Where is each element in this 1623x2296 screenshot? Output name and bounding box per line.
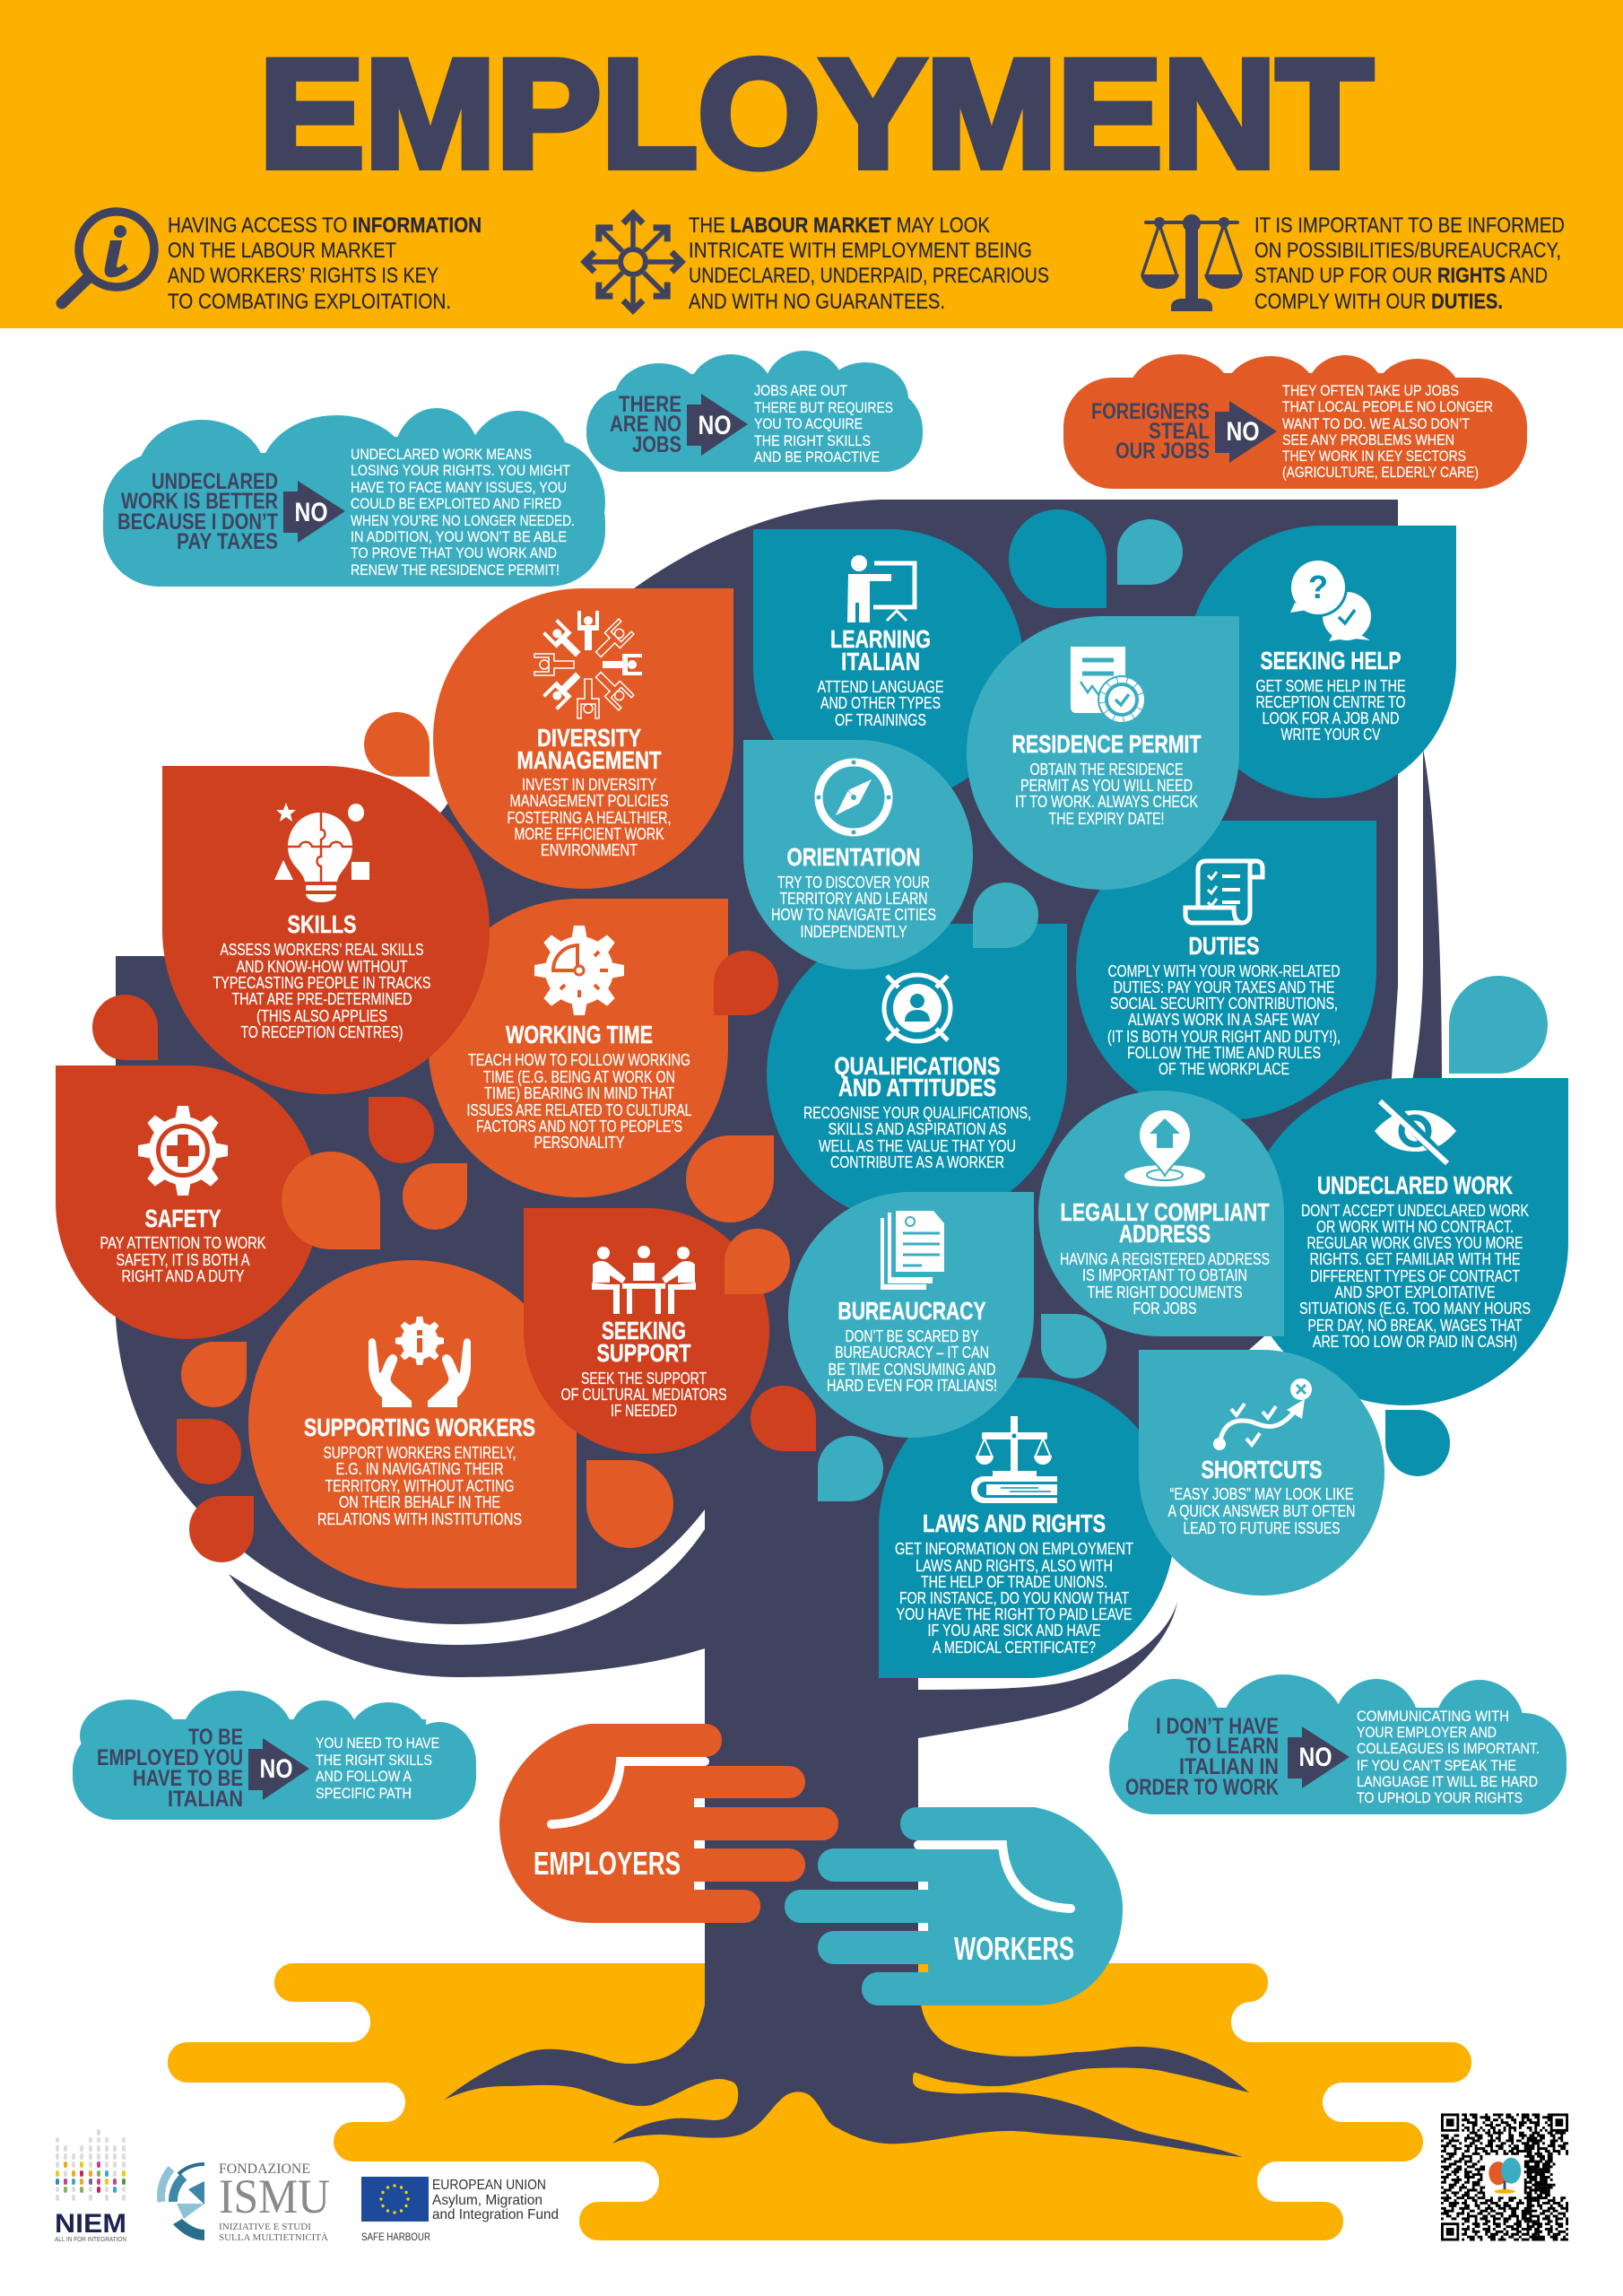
body text xyxy=(213,941,430,1041)
body text: LEAD TO FUTURE ISSUES xyxy=(1184,1519,1340,1537)
answer: COULD BE EXPLOITED AND FIRED xyxy=(351,495,561,512)
icon: scales on book xyxy=(971,1416,1057,1503)
cloud: to be employed myth xyxy=(73,1691,476,1820)
icon: speech bubbles: ? xyxy=(1308,569,1328,605)
answer: YOU NEED TO HAVE xyxy=(316,1735,439,1752)
body text xyxy=(771,874,936,941)
panel: diversity management xyxy=(433,588,733,889)
body text xyxy=(100,1234,265,1285)
body text: ON THEIR BEHALF IN THE xyxy=(339,1493,500,1511)
body text: SAFETY, IT IS BOTH A xyxy=(117,1251,249,1269)
body text: OF CULTURAL MEDIATORS xyxy=(561,1386,726,1404)
body text: FOLLOW THE TIME AND RULES xyxy=(1127,1044,1321,1062)
body text: TYPECASTING PEOPLE IN TRACKS xyxy=(213,974,430,992)
small leaves xyxy=(92,509,1548,1562)
heading: LEGALLY COMPLIANT xyxy=(1060,1198,1270,1226)
myth statement: PAY TAXES xyxy=(177,529,278,554)
body text xyxy=(1299,1202,1531,1351)
body text xyxy=(1060,1250,1270,1318)
panel: legally compliant address xyxy=(1038,1091,1284,1336)
heading: LAWS AND RIGHTS xyxy=(923,1509,1106,1537)
body text xyxy=(818,678,943,729)
arrow: no xyxy=(248,1738,309,1800)
arrow: no xyxy=(1215,401,1277,463)
logo: Fondazione ISMU xyxy=(161,2161,330,2243)
logo: European Union fund: SAFE HARBOUR xyxy=(361,2231,430,2243)
answer: YOU TO ACQUIRE xyxy=(754,415,863,432)
body text: E.G. IN NAVIGATING THEIR xyxy=(335,1460,504,1478)
body text: PAY ATTENTION TO WORK xyxy=(100,1234,265,1252)
cloud: there are no jobs myth xyxy=(586,351,923,472)
body text: SEEK THE SUPPORT xyxy=(581,1370,707,1387)
logo: Fondazione ISMU: FONDAZIONE xyxy=(219,2161,310,2177)
heading: LEARNING xyxy=(830,625,931,653)
myth statement: ITALIAN IN xyxy=(1179,1754,1279,1779)
body text: BE TIME CONSUMING AND xyxy=(829,1361,995,1378)
panel: safety xyxy=(56,1065,319,1339)
icon: three people at table xyxy=(592,1246,696,1314)
icon: puzzle light bulb xyxy=(274,803,369,902)
label: workers: WORKERS xyxy=(954,1930,1074,1967)
text: rights and duties: ON POSSIBILITIES/BUREAUCRACY, xyxy=(1254,239,1561,263)
body text: (THIS ALSO APPLIES xyxy=(256,1007,387,1025)
body text: WELL AS THE VALUE THAT YOU xyxy=(819,1137,1016,1155)
myth statement xyxy=(117,469,278,554)
answer: WANT TO DO. WE ALSO DON’T xyxy=(1282,415,1470,432)
heading: SEEKING HELP xyxy=(1261,647,1401,674)
body text: FOR INSTANCE, DO YOU KNOW THAT xyxy=(899,1589,1129,1607)
heading: DUTIES xyxy=(1189,932,1259,960)
myth statement xyxy=(1125,1714,1279,1800)
body text: IS IMPORTANT TO OBTAIN xyxy=(1082,1266,1247,1284)
panel: supporting workers xyxy=(248,1260,577,1588)
body text: WRITE YOUR CV xyxy=(1280,726,1381,744)
body text: TRY TO DISCOVER YOUR xyxy=(777,874,930,891)
body text: DON’T BE SCARED BY xyxy=(845,1327,979,1345)
body text: A QUICK ANSWER BUT OFTEN xyxy=(1167,1502,1356,1520)
text: rights and duties: IT IS IMPORTANT TO BE INFORMED xyxy=(1254,213,1565,238)
body text: ASSESS WORKERS’ REAL SKILLS xyxy=(221,941,423,959)
body text: PERSONALITY xyxy=(534,1134,624,1152)
NIEM tagline: ALL IN FOR INTEGRATION xyxy=(55,2237,126,2243)
body text: PERMIT AS YOU WILL NEED xyxy=(1020,777,1193,795)
logo: Fondazione ISMU: ISMU xyxy=(219,2170,330,2223)
body text: TEACH HOW TO FOLLOW WORKING xyxy=(468,1051,690,1069)
myth statement: JOBS xyxy=(632,432,681,457)
icon: crossed-out eye xyxy=(1375,1100,1456,1164)
answer: UNDECLARED WORK MEANS xyxy=(351,446,532,463)
heading: QUALIFICATIONS xyxy=(834,1052,1001,1080)
answer: HAVE TO FACE MANY ISSUES, YOU xyxy=(351,479,567,496)
answer: TO UPHOLD YOUR RIGHTS xyxy=(1357,1789,1523,1806)
body text xyxy=(508,776,671,859)
myth statement: TO LEARN xyxy=(1186,1734,1279,1759)
hand: employers xyxy=(499,1724,838,1923)
logo: NIEM xyxy=(55,2129,126,2243)
body text: IF NEEDED xyxy=(611,1402,677,1420)
panel: undeclared work xyxy=(1241,1078,1568,1405)
answer: (AGRICULTURE, ELDERLY CARE) xyxy=(1282,464,1479,481)
heading: ITALIAN xyxy=(841,648,920,675)
body text: THE RIGHT DOCUMENTS xyxy=(1087,1283,1243,1301)
icon: checklist scroll xyxy=(1185,861,1263,923)
text: rights and duties xyxy=(1254,213,1565,314)
text: labour market: AND WITH NO GUARANTEES. xyxy=(689,290,945,314)
text: information xyxy=(168,213,482,314)
heading: SAFETY xyxy=(145,1205,221,1232)
answer: COLLEAGUES IS IMPORTANT. xyxy=(1357,1740,1540,1757)
arrow: no: NO xyxy=(260,1754,292,1784)
body text xyxy=(317,1444,522,1528)
answer: IN ADDITION, YOU WON’T BE ABLE xyxy=(351,528,567,545)
body text: RIGHT AND A DUTY xyxy=(122,1267,244,1285)
icon: person in target xyxy=(884,975,950,1041)
answer xyxy=(1282,382,1493,481)
panel: working time xyxy=(429,899,728,1197)
text: information: TO COMBATING EXPLOITATION. xyxy=(168,290,451,314)
label: employers: EMPLOYERS xyxy=(534,1845,681,1882)
arrow: no: NO xyxy=(698,411,732,440)
panel: shortcuts xyxy=(1139,1350,1384,1596)
heading: SHORTCUTS xyxy=(1202,1456,1322,1483)
answer xyxy=(1357,1708,1540,1806)
text: labour market: UNDECLARED, UNDERPAID, PRECARIOUS xyxy=(689,264,1049,288)
text: labour market xyxy=(689,213,1049,314)
icon: gear clock xyxy=(534,926,624,1015)
body text: TIME) BEARING IN MIND THAT xyxy=(484,1084,674,1102)
body text: “EASY JOBS” MAY LOOK LIKE xyxy=(1169,1485,1354,1503)
body text: ENVIRONMENT xyxy=(541,841,638,859)
answer: THE RIGHT SKILLS xyxy=(754,432,871,449)
heading xyxy=(597,1317,690,1367)
panel: skills xyxy=(162,766,490,1094)
cloud: learning italian myth xyxy=(1109,1674,1567,1814)
answer: LANGUAGE IT WILL BE HARD xyxy=(1357,1773,1538,1790)
heading: RESIDENCE PERMIT xyxy=(1011,730,1202,758)
heading: SUPPORTING WORKERS xyxy=(304,1413,535,1441)
answer: COMMUNICATING WITH xyxy=(1357,1708,1509,1725)
NIEM wordmark: NIEM xyxy=(55,2209,126,2239)
heading xyxy=(1060,1198,1270,1248)
icon: permit with badge xyxy=(1071,647,1146,724)
golden ground xyxy=(168,1963,1484,2240)
answer: SEE ANY PROBLEMS WHEN xyxy=(1282,431,1454,448)
body text: REGULAR WORK GIVES YOU MORE xyxy=(1307,1234,1523,1252)
heading: MANAGEMENT xyxy=(516,746,662,774)
logo: Fondazione ISMU: SULLA MULTIETNICITÀ xyxy=(219,2232,328,2243)
body text: ARE TOO LOW OR PAID IN CASH) xyxy=(1313,1333,1517,1351)
body text: AND KNOW-HOW WITHOUT xyxy=(237,958,408,976)
icon: teacher at board xyxy=(847,555,915,622)
body text: SKILLS AND ASPIRATION AS xyxy=(829,1120,1006,1138)
body text xyxy=(1167,1485,1356,1537)
body text: AND OTHER TYPES xyxy=(820,694,941,712)
answer: THEY OFTEN TAKE UP JOBS xyxy=(1282,382,1459,399)
myth statement: ITALIAN xyxy=(168,1787,243,1812)
body text: ISSUES ARE RELATED TO CULTURAL xyxy=(466,1101,692,1119)
body text: OBTAIN THE RESIDENCE xyxy=(1029,761,1184,778)
icon: speech bubbles xyxy=(1289,558,1371,641)
text: labour market: INTRICATE WITH EMPLOYMENT BEING xyxy=(689,239,1032,263)
heading: SUPPORT xyxy=(597,1339,690,1367)
myth statement: BECAUSE I DON’T xyxy=(117,509,278,535)
panel: orientation xyxy=(743,740,973,970)
body text: THE EXPIRY DATE! xyxy=(1049,810,1164,828)
answer: IF YOU CAN’T SPEAK THE xyxy=(1357,1757,1516,1774)
answer: WHEN YOU’RE NO LONGER NEEDED. xyxy=(351,512,575,529)
logo: European Union fund xyxy=(361,2177,559,2243)
answer: LOSING YOUR RIGHTS. YOU MIGHT xyxy=(351,462,570,479)
body text: TO RECEPTION CENTRES) xyxy=(240,1023,404,1041)
answer: THEY WORK IN KEY SECTORS xyxy=(1282,448,1466,465)
body text: DIFFERENT TYPES OF CONTRACT xyxy=(1310,1267,1520,1285)
myth statement: OUR JOBS xyxy=(1115,439,1210,464)
icon: stacked documents xyxy=(881,1211,944,1290)
body text: IF YOU ARE SICK AND HAVE xyxy=(927,1622,1101,1639)
tree: canopy, trunk and roots xyxy=(116,500,1442,2157)
right outer branch xyxy=(1411,749,1442,1085)
heading xyxy=(516,724,662,774)
answer xyxy=(351,446,575,578)
panel: duties xyxy=(1076,821,1376,1120)
heading: ADDRESS xyxy=(1119,1220,1211,1248)
body text: SOCIAL SECURITY CONTRIBUTIONS, xyxy=(1110,995,1338,1013)
body text: PER DAY, NO BREAK, WAGES THAT xyxy=(1307,1317,1523,1335)
arrow: no xyxy=(687,394,748,456)
answer xyxy=(316,1735,439,1802)
icon: eight arrows xyxy=(585,213,681,310)
heading: ORIENTATION xyxy=(787,843,920,871)
cloud: undeclared work myth xyxy=(103,408,605,587)
panel: laws and rights xyxy=(879,1378,1175,1678)
heading: AND ATTITUDES xyxy=(838,1074,996,1101)
body text: ALWAYS WORK IN A SAFE WAY xyxy=(1128,1011,1320,1029)
body text: RECOGNISE YOUR QUALIFICATIONS, xyxy=(803,1104,1031,1122)
heading: SKILLS xyxy=(287,910,357,938)
body text xyxy=(1015,761,1198,828)
body text: GET SOME HELP IN THE xyxy=(1255,677,1406,695)
myth statement: EMPLOYED YOU xyxy=(97,1745,243,1770)
myth statement: ARE NO xyxy=(610,412,681,437)
text: labour market: THE LABOUR MARKET MAY LOOK xyxy=(689,213,990,238)
body text: THAT ARE PRE-DETERMINED xyxy=(231,990,412,1008)
icon: winding path xyxy=(1213,1378,1312,1450)
answer xyxy=(754,382,893,465)
answer: AND BE PROACTIVE xyxy=(754,448,880,465)
heading: WORKING TIME xyxy=(506,1021,653,1048)
body text: DUTIES: PAY YOUR TAXES AND THE xyxy=(1114,978,1334,996)
heading: SEEKING xyxy=(602,1317,686,1344)
myth statement xyxy=(1091,399,1210,464)
arrow: no: NO xyxy=(294,498,328,527)
body text: RIGHTS. GET FAMILIAR WITH THE xyxy=(1309,1250,1521,1268)
arrow: no xyxy=(1288,1726,1350,1788)
body text: IT TO WORK. ALWAYS CHECK xyxy=(1015,793,1198,811)
body text: OF THE WORKPLACE xyxy=(1159,1060,1289,1078)
body text: HOW TO NAVIGATE CITIES xyxy=(771,906,936,924)
answer: JOBS ARE OUT xyxy=(754,382,847,399)
panel: seeking support xyxy=(524,1208,769,1454)
logo: Fondazione ISMU: INIZIATIVE E STUDI xyxy=(219,2222,311,2232)
body text: BUREAUCRACY – IT CAN xyxy=(835,1344,989,1361)
icon: magnifier with i xyxy=(62,212,154,303)
panel: seeking help xyxy=(1187,526,1456,798)
title: EMPLOYMENT xyxy=(259,28,1373,200)
body text: FOSTERING A HEALTHIER, xyxy=(508,809,671,827)
logo: European Union fund: Asylum, Migration xyxy=(432,2193,542,2208)
body text: INVEST IN DIVERSITY xyxy=(522,776,656,794)
body text: FOR JOBS xyxy=(1133,1300,1196,1318)
arrow: no xyxy=(283,481,345,543)
text: information: ON THE LABOUR MARKET xyxy=(168,239,396,263)
heading: UNDECLARED WORK xyxy=(1317,1171,1513,1199)
body text: TERRITORY AND LEARN xyxy=(780,890,927,908)
body text: OF TRAININGS xyxy=(835,711,926,729)
answer: RENEW THE RESIDENCE PERMIT! xyxy=(351,561,560,578)
body text: RECEPTION CENTRE TO xyxy=(1255,693,1406,711)
myth statement: WORK IS BETTER xyxy=(121,489,278,514)
body text xyxy=(1107,962,1341,1078)
body text xyxy=(466,1051,692,1152)
body text: DON’T ACCEPT UNDECLARED WORK xyxy=(1301,1202,1529,1220)
heading xyxy=(830,625,931,675)
body text: HAVING A REGISTERED ADDRESS xyxy=(1060,1250,1270,1268)
myth statement: THERE xyxy=(619,392,681,417)
body text: HARD EVEN FOR ITALIANS! xyxy=(827,1377,997,1395)
answer: THE RIGHT SKILLS xyxy=(316,1752,432,1769)
answer: AND FOLLOW A xyxy=(316,1768,412,1785)
panel: bureaucracy xyxy=(788,1192,1034,1438)
icon: compass xyxy=(816,761,891,834)
logo: European Union fund: EUROPEAN UNION xyxy=(432,2178,546,2193)
myth statement xyxy=(97,1725,243,1812)
myth statement: HAVE TO BE xyxy=(133,1766,243,1791)
body text: AND SPOT EXPLOITATIVE xyxy=(1334,1283,1496,1301)
body text: LOOK FOR A JOB AND xyxy=(1263,709,1399,727)
text: rights and duties: COMPLY WITH OUR DUTIES. xyxy=(1254,290,1503,314)
QR code xyxy=(1441,2113,1568,2240)
body text xyxy=(895,1540,1133,1657)
text: information: AND WORKERS’ RIGHTS IS KEY xyxy=(168,264,438,288)
body text: TIME (E.G. BEING AT WORK ON xyxy=(483,1068,675,1086)
body text: LAWS AND RIGHTS, ALSO WITH xyxy=(916,1557,1113,1575)
body text: OR WORK WITH NO CONTRACT. xyxy=(1316,1218,1514,1236)
body text: FACTORS AND NOT TO PEOPLE’S xyxy=(476,1118,682,1135)
body text: A MEDICAL CERTIFICATE? xyxy=(933,1639,1096,1657)
myth statement: I DON’T HAVE xyxy=(1156,1714,1279,1739)
answer: SPECIFIC PATH xyxy=(316,1785,412,1802)
body text: SUPPORT WORKERS ENTIRELY, xyxy=(323,1444,516,1462)
body text xyxy=(561,1370,726,1420)
icon: gear with cross xyxy=(138,1106,228,1196)
heading xyxy=(834,1052,1001,1101)
body text: TERRITORY, WITHOUT ACTING xyxy=(325,1477,515,1495)
lower left branch xyxy=(229,1529,705,1677)
heading: DIVERSITY xyxy=(537,724,641,752)
myth statement: STEAL xyxy=(1149,419,1210,444)
panel: residence permit xyxy=(967,616,1239,890)
body text xyxy=(1255,677,1406,744)
answer: THERE BUT REQUIRES xyxy=(754,399,893,416)
header band xyxy=(0,0,1623,328)
cloud: foreigners steal jobs myth xyxy=(1063,354,1527,489)
answer: THAT LOCAL PEOPLE NO LONGER xyxy=(1282,398,1493,415)
body text: THE HELP OF TRADE UNIONS. xyxy=(921,1573,1107,1591)
icon: map pin with house xyxy=(1124,1109,1205,1187)
heading: BUREAUCRACY xyxy=(838,1297,986,1325)
panel: learning italian xyxy=(753,529,1024,804)
icon: circle of people xyxy=(534,611,642,718)
text: rights and duties: STAND UP FOR OUR RIGHTS AND xyxy=(1254,264,1548,288)
hand: workers xyxy=(785,1807,1123,2005)
arrow: no: NO xyxy=(1298,1743,1332,1772)
body text: YOU HAVE THE RIGHT TO PAID LEAVE xyxy=(897,1605,1132,1623)
text: information: HAVING ACCESS TO INFORMATION xyxy=(168,213,482,238)
body text: INDEPENDENTLY xyxy=(800,923,907,941)
body text xyxy=(803,1104,1031,1171)
icon: hands holding gear xyxy=(369,1317,471,1407)
body text: RELATIONS WITH INSTITUTIONS xyxy=(317,1510,522,1528)
logo: European Union fund: and Integration Fund xyxy=(432,2207,559,2222)
body text: MANAGEMENT POLICIES xyxy=(509,792,669,810)
body text: CONTRIBUTE AS A WORKER xyxy=(830,1153,1004,1171)
answer: YOUR EMPLOYER AND xyxy=(1357,1724,1497,1741)
myth statement: ORDER TO WORK xyxy=(1125,1775,1279,1800)
body text xyxy=(827,1327,997,1395)
panel: qualifications and attitudes xyxy=(767,924,1067,1224)
body text: (IT IS BOTH YOUR RIGHT AND DUTY!), xyxy=(1107,1028,1341,1046)
myth statement: TO BE xyxy=(188,1725,243,1750)
icon: scales xyxy=(1141,214,1243,311)
body text: COMPLY WITH YOUR WORK-RELATED xyxy=(1108,962,1340,980)
arrow: no: NO xyxy=(1227,417,1259,447)
body text: GET INFORMATION ON EMPLOYMENT xyxy=(895,1540,1133,1558)
myth statement xyxy=(610,392,681,457)
myth statement: FOREIGNERS xyxy=(1091,399,1210,424)
body text: SITUATIONS (E.G. TOO MANY HOURS xyxy=(1299,1300,1531,1318)
body text: ATTEND LANGUAGE xyxy=(818,678,943,696)
myth statement: UNDECLARED xyxy=(152,469,278,494)
answer: TO PROVE THAT YOU WORK AND xyxy=(351,544,557,561)
body text: MORE EFFICIENT WORK xyxy=(515,825,664,843)
